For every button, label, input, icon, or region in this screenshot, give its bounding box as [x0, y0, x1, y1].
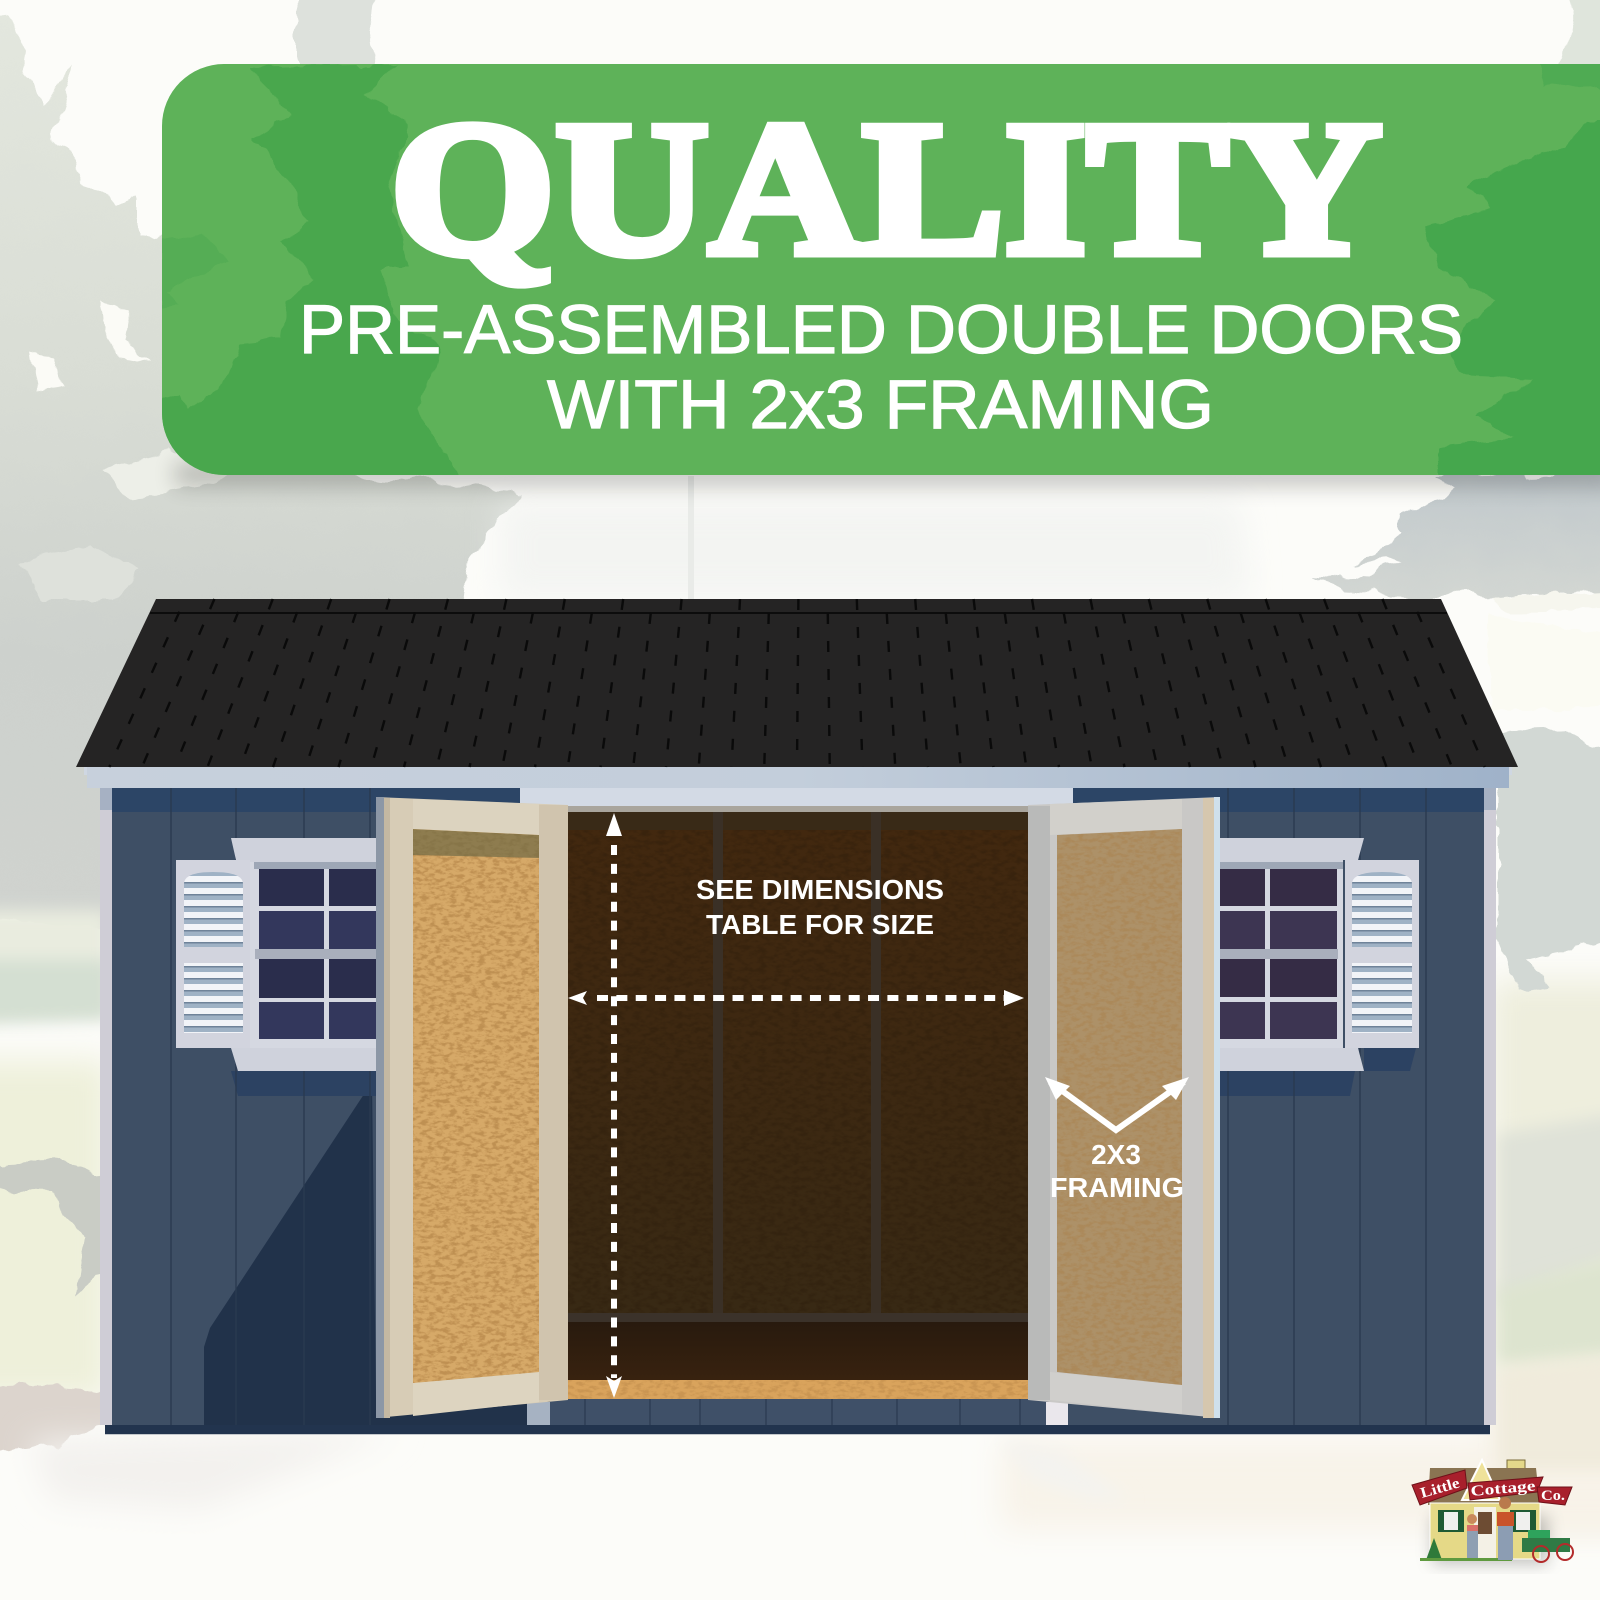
door opening interior: [568, 812, 1028, 1399]
logo cottage: [1420, 1460, 1540, 1561]
lower siding below doors: [527, 1399, 1068, 1425]
roof: [76, 599, 1518, 767]
arrow: door width dimension: [568, 990, 1024, 1006]
left window: [231, 838, 376, 1071]
dimensions note: TABLE FOR SIZE: [706, 909, 934, 940]
shed illustration: [76, 599, 1518, 1435]
corner trims: [100, 788, 1496, 1425]
roof fascia: [84, 767, 1512, 812]
subtitle line one: PRE-ASSEMBLED DOUBLE DOORS: [299, 291, 1463, 368]
title: QUALITY: QUALITY: [390, 82, 1382, 295]
base strip: [105, 1425, 1490, 1435]
logo ribbon: Little: [1419, 1475, 1462, 1502]
logo wagon: [1522, 1530, 1573, 1562]
framing label: 2X3: [1091, 1139, 1141, 1170]
framing label: FRAMING: [1050, 1172, 1184, 1203]
left shutter: [176, 860, 250, 1048]
dimensions note: SEE DIMENSIONS: [696, 874, 944, 905]
siding wall: [112, 788, 1484, 1425]
framing label: [1050, 1139, 1184, 1203]
logo: Little Cottage Co.: [1412, 1460, 1573, 1564]
right window: [1219, 838, 1364, 1071]
logo ribbon: [1412, 1470, 1572, 1505]
right door OSB panel: [1057, 829, 1182, 1385]
banner shadow: [175, 462, 1600, 486]
left door OSB panel: [413, 829, 539, 1383]
logo ribbon: Cottage: [1470, 1478, 1537, 1500]
right door: [1028, 797, 1220, 1418]
logo figures: [1467, 1497, 1514, 1560]
arrow: door height dimension: [606, 813, 622, 1398]
right shutter: [1345, 860, 1419, 1048]
subtitle line two: WITH 2x3 FRAMING: [547, 366, 1214, 443]
panel: green title banner: [150, 60, 1600, 490]
logo ribbon: Co.: [1541, 1488, 1565, 1504]
arrows: 2x3 framing pointers: [1045, 1077, 1189, 1130]
left door: [376, 797, 568, 1418]
dimensions note: [696, 874, 944, 940]
